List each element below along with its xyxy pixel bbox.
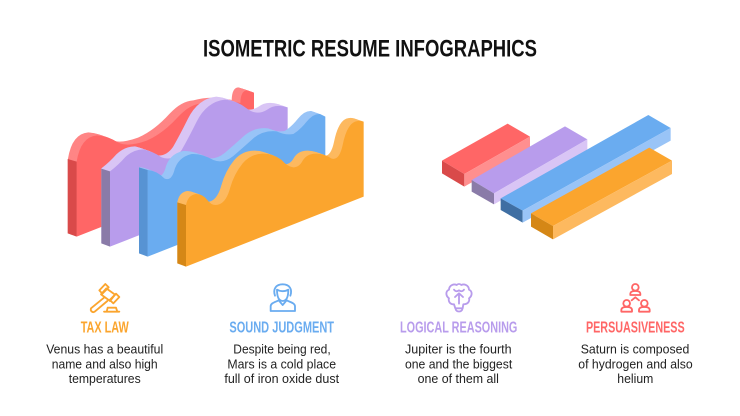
text: logical reasoning description: one and the biggest	[405, 356, 513, 371]
heading: sound judgment: SOUND JUDGMENT	[229, 320, 334, 336]
bar: red	[442, 124, 530, 187]
icon: gavel	[91, 284, 119, 312]
item: tax law	[46, 284, 163, 386]
text: sound judgment description: Despite being red,	[233, 342, 331, 357]
item: persuasiveness	[578, 284, 693, 386]
chart: isometric bars	[442, 115, 672, 239]
text: persuasiveness description: Saturn is composed	[581, 342, 689, 357]
text: logical reasoning description: Jupiter is the fourth	[405, 342, 512, 357]
bar: orange	[531, 148, 672, 239]
text: sound judgment description	[224, 342, 339, 386]
text: tax law description	[46, 342, 163, 386]
item: sound judgment	[224, 284, 339, 386]
heading: logical reasoning: LOGICAL REASONING	[400, 320, 517, 336]
text: sound judgment description: full of iron oxide dust	[224, 371, 339, 386]
text: logical reasoning description	[405, 342, 513, 386]
heading: persuasiveness: PERSUASIVENESS	[586, 320, 685, 336]
text: persuasiveness description: helium	[617, 371, 653, 386]
text: persuasiveness description	[578, 342, 693, 386]
text: tax law description: temperatures	[69, 371, 141, 386]
icon: person with headset	[271, 284, 295, 311]
icon: brain light bulb	[446, 284, 472, 311]
wave: red	[68, 87, 254, 237]
text: logical reasoning description: one of them all	[418, 371, 499, 386]
heading: tax law: TAX LAW	[81, 320, 129, 336]
bar: blue	[501, 115, 671, 223]
text: persuasiveness description: of hydrogen and also	[578, 356, 693, 371]
text: sound judgment description: Mars is a cold place	[227, 356, 336, 371]
wave: purple	[101, 97, 288, 247]
chart: isometric wave areas	[68, 87, 364, 267]
title: ISOMETRIC RESUME INFOGRAPHICS	[203, 36, 537, 62]
item: logical reasoning	[400, 284, 517, 386]
text: tax law description: name and also high	[52, 356, 158, 371]
text: tax law description: Venus has a beautiful	[46, 342, 163, 357]
wave: orange	[177, 118, 364, 267]
bar: purple	[472, 126, 587, 204]
wave: blue	[139, 111, 325, 257]
icon: three connected people	[621, 284, 650, 312]
